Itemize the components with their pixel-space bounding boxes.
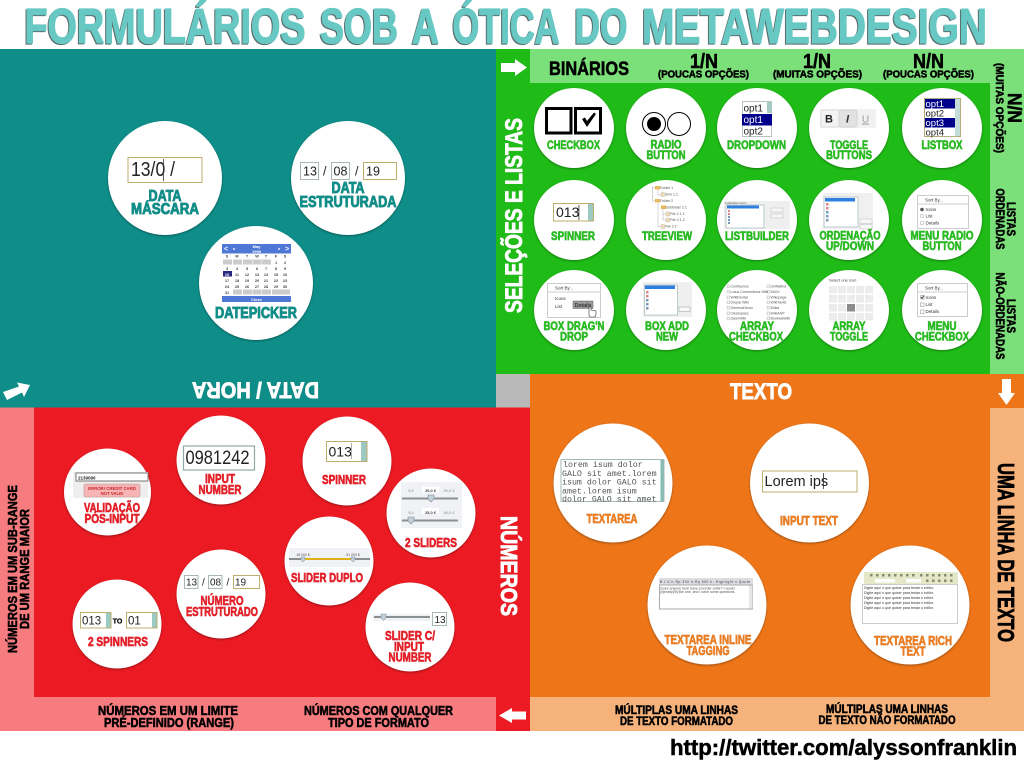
header band: cardinalidade: BINÁRIOS — [549, 58, 629, 80]
item: array checkbox: Wikia — [770, 306, 779, 310]
item: datepicker: 9 — [284, 267, 286, 271]
item: array checkbox: Drupal Wiki — [730, 300, 749, 304]
item: listbuilder: Listbuilder items — [725, 201, 747, 205]
item: menu radio button: Icons — [926, 207, 937, 212]
panel: texto — [530, 374, 1024, 731]
item: textarea rich text: TEXTAREA RICH — [874, 633, 952, 648]
item: spinner — [302, 416, 392, 506]
item: treeview: TREEVIEW — [642, 229, 693, 243]
item: toggle buttons: B — [825, 114, 833, 126]
item: array checkbox — [717, 270, 797, 350]
item: textarea rich text: Digite aqui o que quiser para testar o editor. — [864, 596, 934, 600]
item: dropdown: DROPDOWN — [727, 138, 786, 152]
item: menu checkbox: Icons — [926, 295, 937, 300]
item: datepicker: S — [284, 254, 287, 258]
title: DO — [574, 0, 628, 54]
item: spinner — [534, 180, 614, 260]
item: radio button: RADIO — [650, 138, 682, 152]
title: ÓTICA — [452, 0, 560, 54]
item: 2 sliders: 50,0 € — [443, 510, 455, 515]
item: box drag'n drop — [534, 270, 614, 350]
item: datepicker: 19 — [245, 279, 249, 283]
heading: seleções e listas: SELEÇÕES E LISTAS — [500, 118, 528, 313]
item: radio button: BUTTON — [646, 148, 686, 162]
item: slider duplo: 18 000 $ — [296, 553, 310, 557]
item: número estruturado: / — [226, 578, 230, 588]
item: menu radio button: Details — [926, 220, 940, 226]
item: datepicker: S — [226, 254, 229, 258]
item: toggle buttons: I — [846, 114, 850, 126]
item: 2 sliders: 5,0 — [408, 488, 415, 493]
footer url: http://twitter.com/alyssonfranklin — [670, 735, 1017, 760]
item: validação pós-input — [64, 448, 151, 536]
item: datepicker: < — [224, 246, 228, 253]
item: treeview: Folder 2 — [660, 199, 673, 203]
item: array checkbox: WikiDental — [730, 296, 748, 300]
title: A — [412, 0, 439, 54]
item: slider duplo: 51 000 $ — [346, 553, 360, 557]
item: datepicker: 23 — [283, 279, 287, 283]
item: número estruturado — [176, 550, 266, 638]
item: datepicker: 8 — [275, 267, 277, 271]
panel: números — [0, 408, 530, 731]
side label: sub-range: NÚMEROS EM UM SUB-RANGE — [5, 485, 20, 653]
item: spinner: 013 — [328, 444, 352, 460]
item: menu checkbox: Details — [926, 309, 940, 314]
item: datepicker — [199, 226, 313, 340]
item: box drag'n drop: BOX DRAG'N — [544, 319, 604, 333]
item: datepicker: 2 — [284, 261, 286, 265]
item: treeview: Folder 1 — [660, 186, 673, 190]
center grey square — [496, 374, 530, 408]
item: box drag'n drop: DROP — [560, 330, 588, 344]
item: datepicker: M — [235, 254, 239, 258]
item: datepicker: T — [265, 254, 268, 258]
item: treeview — [626, 180, 706, 260]
item: datepicker: 28 — [264, 285, 268, 289]
item: listbox: opt4 — [926, 128, 944, 138]
item: validação pós-input: VALIDAÇÃO — [84, 500, 140, 515]
item: array toggle — [809, 270, 889, 350]
bottom label: múltiplas não formatado — [818, 703, 956, 727]
item: slider com input number: NUMBER — [388, 650, 432, 664]
item: slider duplo — [284, 516, 374, 606]
header band: cardinalidade: (MUITAS OPÇÕES) — [993, 63, 1006, 153]
item: textarea inline tagging: [b]really[/b] like one, and I have some questions. — [660, 590, 735, 594]
item: 2 spinners — [72, 580, 162, 668]
item: 2 spinners: 013 — [82, 616, 101, 628]
item: input text — [750, 424, 869, 542]
item: datepicker: 3 — [226, 267, 228, 271]
item: menu checkbox: List — [926, 302, 933, 307]
header band: cardinalidade: (POUCAS OPÇÕES) — [658, 68, 749, 80]
item: array checkbox: GemmaDemo — [730, 306, 753, 310]
item: datepicker: 6 — [256, 267, 258, 271]
item: datepicker: 12 — [245, 273, 249, 277]
item: 2 sliders: 5,0 — [408, 510, 415, 515]
item: datepicker: 29 — [274, 285, 278, 289]
item: input text: INPUT TEXT — [780, 513, 838, 528]
item: datepicker: 10 — [225, 273, 229, 277]
item: dropdown: opt1 — [744, 115, 763, 126]
item: menu checkbox: Sort By... — [925, 286, 943, 290]
item: box drag'n drop: List — [555, 304, 563, 309]
item: número estruturado: 19 — [235, 578, 247, 588]
heading: números: NÚMEROS — [496, 516, 523, 616]
arrow: data / hora — [3, 382, 30, 400]
item: listbox: opt1 — [926, 99, 944, 110]
item: dropdown: opt1 — [744, 104, 763, 114]
item: input number: 0981242 — [186, 448, 250, 469]
item: treeview: Item 1.1 — [665, 192, 678, 196]
item: data estruturada: 19 — [366, 164, 380, 178]
arrow: texto — [998, 379, 1015, 405]
item: array toggle: Select one icon — [829, 278, 856, 282]
item: menu radio button: Sort By... — [925, 198, 943, 202]
header band: cardinalidade: ORDENADAS — [993, 188, 1007, 250]
item: textarea — [554, 424, 672, 542]
item: datepicker: 22 — [274, 279, 278, 283]
item: box drag'n drop: Sort By... — [555, 286, 573, 290]
item: textarea: lorem isum dolor — [563, 460, 643, 470]
item: input number: INPUT — [205, 472, 235, 486]
item: número estruturado: / — [202, 578, 205, 588]
item: datepicker: 1 — [275, 261, 277, 265]
item: datepicker: > — [285, 246, 289, 253]
item: 2 sliders — [386, 468, 476, 558]
item: spinner: SPINNER — [322, 473, 366, 487]
item: datepicker: 4 — [236, 267, 239, 271]
item: 2 spinners: 2 SPINNERS — [88, 635, 148, 649]
bottom label: range: NÚMEROS EM UM LIMITE — [98, 703, 238, 718]
item: array checkbox: ARRAY — [740, 319, 774, 333]
item: input text: Lorem ips — [764, 474, 828, 490]
item: datepicker: 24 — [225, 285, 230, 289]
item: textarea rich text — [850, 546, 970, 664]
header band: cardinalidade — [530, 49, 1024, 374]
item: textarea: TEXTAREA — [586, 511, 638, 526]
item: validação pós-input: 2139090 — [78, 476, 96, 480]
bottom label: qualquer formato: NÚMEROS COM QUALQUER — [304, 703, 453, 718]
item: datepicker: 30 — [283, 285, 287, 289]
item: data mascara: MÁSCARA — [131, 201, 199, 218]
item: toggle buttons: TOGGLE — [830, 138, 868, 152]
item: treeview: Subfolder 2.1 — [666, 206, 687, 210]
item: datepicker: 21 — [264, 279, 268, 283]
item: datepicker: Close — [251, 297, 263, 302]
item: datepicker: 17 — [225, 279, 229, 283]
item: checkbox: CHECKBOX — [547, 138, 600, 152]
item: array checkbox: Clearspace — [730, 312, 749, 316]
item: menu radio button: BUTTON — [922, 239, 962, 253]
item: data mascara — [108, 121, 222, 235]
item: textarea: isum dolor GALO sit — [562, 478, 657, 488]
item: box add new: BOX ADD — [645, 319, 689, 333]
item: treeview: File 2.1.1 — [670, 212, 685, 216]
item: data mascara: 13/0 / — [131, 159, 175, 181]
item: 2 spinners: 01 — [128, 616, 141, 628]
item: box add new — [626, 270, 706, 350]
item: datepicker: T — [246, 254, 249, 258]
item: data estruturada — [291, 121, 405, 235]
item: menu radio button: List — [926, 214, 933, 218]
item: array checkbox: WikiASP — [770, 312, 785, 316]
item: menu checkbox: CHECKBOX — [915, 330, 969, 344]
item: textarea: GALO sit amet.lorem — [562, 469, 657, 479]
item: textarea inline tagging: Does anyone here have a border collie? I would — [660, 586, 735, 590]
item: 2 sliders: 25,0 € — [425, 510, 437, 515]
item: box drag'n drop: Details — [574, 303, 592, 309]
item: treeview: File 2.2 — [665, 224, 677, 228]
item: array toggle: TOGGLE — [830, 330, 868, 344]
header band: cardinalidade: LISTAS — [1004, 299, 1018, 333]
item: checkbox — [534, 88, 614, 168]
item: validação pós-input: ERROR! CREDIT CARD — [88, 486, 136, 491]
item: box drag'n drop: Icons — [555, 296, 567, 301]
bottom label: múltiplas não formatado: MÚLTIPLAS UMA LINHAS — [826, 703, 948, 716]
item: textarea inline tagging: B I U h-Rp 300 h-Rp 300 h- Highlight x Quote — [660, 580, 750, 584]
item: array checkbox: Confluence — [730, 284, 749, 288]
item: textarea: dolor GALO sit amet — [562, 494, 657, 504]
item: número estruturado: ESTRUTURADO — [186, 605, 258, 619]
item: listbox — [902, 88, 982, 168]
item: menu radio button: MENU RADIO — [910, 228, 974, 242]
side label: sub-range — [5, 485, 32, 653]
item: número estruturado: 13 — [186, 578, 198, 588]
item: datepicker: 1998 — [252, 249, 262, 254]
item: array checkbox: UniNativa — [770, 284, 786, 288]
item: input number: NUMBER — [198, 483, 242, 497]
item: datepicker: 5 — [246, 267, 248, 271]
item: array checkbox: WiOn — [770, 290, 779, 294]
item: textarea inline tagging: TAGGING — [686, 643, 730, 658]
item: listbox: opt3 — [926, 118, 944, 129]
item: listbox: LISTBOX — [922, 138, 962, 152]
item: datepicker: 26 — [245, 285, 249, 289]
header band: cardinalidade: 1/N — [803, 51, 831, 73]
item: validação pós-input: PÓS-INPUT — [84, 511, 140, 526]
item: datepicker: 7 — [265, 267, 267, 271]
item: data estruturada: 08 — [334, 164, 347, 178]
panel: data / hora — [0, 49, 496, 408]
item: textarea inline tagging: TEXTAREA INLINE — [664, 632, 752, 647]
bottom label: múltiplas formatado — [615, 704, 738, 728]
item: data estruturada: 13 — [303, 164, 317, 178]
item: data estruturada: / — [323, 164, 327, 178]
item: textarea rich text: Digite aqui o que quiser para testar o editor. — [864, 601, 934, 605]
item: array checkbox: CHECKBOX — [729, 330, 783, 344]
item: datepicker: May — [253, 244, 261, 249]
item: datepicker: « — [233, 246, 236, 252]
item: menu radio button — [902, 180, 982, 260]
arrow: números — [499, 708, 526, 723]
title — [24, 0, 987, 54]
item: datepicker: 18 — [235, 279, 239, 283]
item: array checkbox: BookwaWiki — [770, 316, 790, 320]
item: toggle buttons: U — [862, 114, 869, 126]
item: box add new: NEW — [656, 330, 679, 344]
item: datepicker: 15 — [274, 273, 278, 277]
bottom label: múltiplas não formatado: DE TEXTO NÃO FORMATADO — [818, 714, 956, 727]
header band: cardinalidade: LISTAS — [1004, 202, 1018, 236]
bottom label: qualquer formato: TIPO DE FORMATO — [328, 716, 429, 730]
item: listbuilder — [717, 180, 797, 260]
item: data estruturada: / — [355, 164, 359, 178]
item: array checkbox: Lotus Connections Wiki — [730, 290, 768, 294]
item: ordenação up/down — [809, 180, 889, 260]
side label: sub-range: DE UM RANGE MAIOR — [17, 508, 32, 629]
item: slider com input number — [366, 582, 454, 672]
item: validação pós-input: NOT VALID — [101, 491, 123, 496]
item: toggle buttons: BUTTONS — [826, 148, 872, 162]
item: datepicker: 13 — [255, 273, 259, 277]
item: slider com input number: INPUT — [394, 640, 424, 654]
item: número estruturado: 08 — [210, 578, 222, 588]
panel: seleções e listas — [496, 49, 1024, 374]
item: 2 sliders: 2 SLIDERS — [405, 536, 457, 550]
item: datepicker: 25 — [235, 285, 239, 289]
item: textarea rich text: Digite aqui o que quiser para testar o editor. — [864, 586, 934, 590]
item: datepicker: 27 — [255, 285, 259, 289]
item: listbox: opt2 — [926, 108, 944, 120]
item: textarea inline tagging — [648, 546, 766, 664]
item: datepicker: 14 — [264, 273, 269, 277]
item: array checkbox: Wikepage — [770, 296, 786, 300]
item: data estruturada: ESTRUTURADA — [300, 194, 396, 211]
item: textarea rich text: Digite aqui o que quiser para testar o editor. — [864, 591, 934, 595]
item: spinner: SPINNER — [551, 229, 595, 243]
item: toggle buttons — [809, 88, 889, 168]
item: treeview: File 2.1.2 — [670, 218, 685, 222]
heading: texto: TEXTO — [730, 379, 792, 404]
bottom label: range — [98, 703, 238, 730]
item: número estruturado: NÚMERO — [200, 593, 244, 608]
header band: cardinalidade: (POUCAS OPÇÕES) — [883, 68, 974, 80]
item: datepicker: DATEPICKER — [215, 305, 297, 322]
header band: cardinalidade: N/N — [913, 51, 944, 73]
arrow: seleções — [501, 59, 527, 76]
bottom label: range: PRÉ-DEFINIDO (RANGE) — [104, 715, 234, 730]
bottom label: múltiplas formatado: MÚLTIPLAS UMA LINHAS — [615, 704, 738, 717]
item: textarea: amet.lorem isum — [562, 486, 637, 496]
header band: cardinalidade: (MUITAS OPÇÕES) — [773, 68, 862, 80]
item: textarea rich text: TEXT — [900, 644, 926, 658]
item: array checkbox: OpenWiki — [730, 316, 746, 320]
title: FORMULÁRIOS — [24, 0, 306, 54]
header band: cardinalidade: N/N — [1003, 93, 1024, 123]
header band: cardinalidade: 1/N — [690, 51, 718, 73]
bottom label: múltiplas formatado: DE TEXTO FORMATADO — [620, 716, 733, 728]
item: ordenação up/down: UP/DOWN — [826, 239, 874, 253]
item: input number — [176, 416, 266, 504]
item: datepicker: 20 — [255, 279, 259, 283]
item: listbuilder: LISTBUILDER — [725, 229, 789, 243]
item: slider duplo: SLIDER DUPLO — [291, 571, 363, 585]
item: datepicker: 31 — [225, 291, 229, 295]
item: menu checkbox — [902, 270, 982, 350]
item: spinner: 013 — [556, 204, 580, 220]
item: radio button — [626, 88, 706, 168]
item: datepicker: F — [275, 254, 278, 258]
side label: uma linha de texto: UMA LINHA DE TEXTO — [993, 463, 1019, 642]
item: menu checkbox: MENU — [928, 319, 956, 333]
item: datepicker: 16 — [283, 273, 287, 277]
item: slider com input number: SLIDER C/ — [385, 629, 435, 643]
item: 2 sliders: 25,0 € — [425, 488, 437, 493]
item: textarea rich text: Digite aqui o que quiser para testar o editor. — [864, 606, 934, 610]
item: datepicker: W — [255, 254, 259, 258]
heading: data / hora: DATA / HORA — [192, 378, 319, 402]
item: data mascara: DATA — [148, 188, 182, 205]
item: data estruturada: DATA — [332, 180, 364, 197]
item: datepicker: » — [278, 246, 281, 252]
bottom label: qualquer formato — [304, 703, 453, 730]
header band: cardinalidade: NÃO-ORDENADAS — [993, 272, 1008, 360]
item: 2 spinners: TO — [113, 618, 123, 626]
item: array toggle: ARRAY — [832, 319, 866, 333]
item: array checkbox: WikiTaxitz — [770, 300, 787, 304]
item: dropdown: opt2 — [744, 126, 763, 138]
title: SOB — [320, 0, 398, 54]
item: slider com input number: 13 — [434, 615, 446, 626]
item: ordenação up/down: ORDENAÇÃO — [820, 228, 880, 242]
item: dropdown — [717, 88, 797, 168]
item: datepicker: 11 — [235, 273, 239, 277]
item: 2 sliders: 50,0 € — [443, 488, 455, 493]
